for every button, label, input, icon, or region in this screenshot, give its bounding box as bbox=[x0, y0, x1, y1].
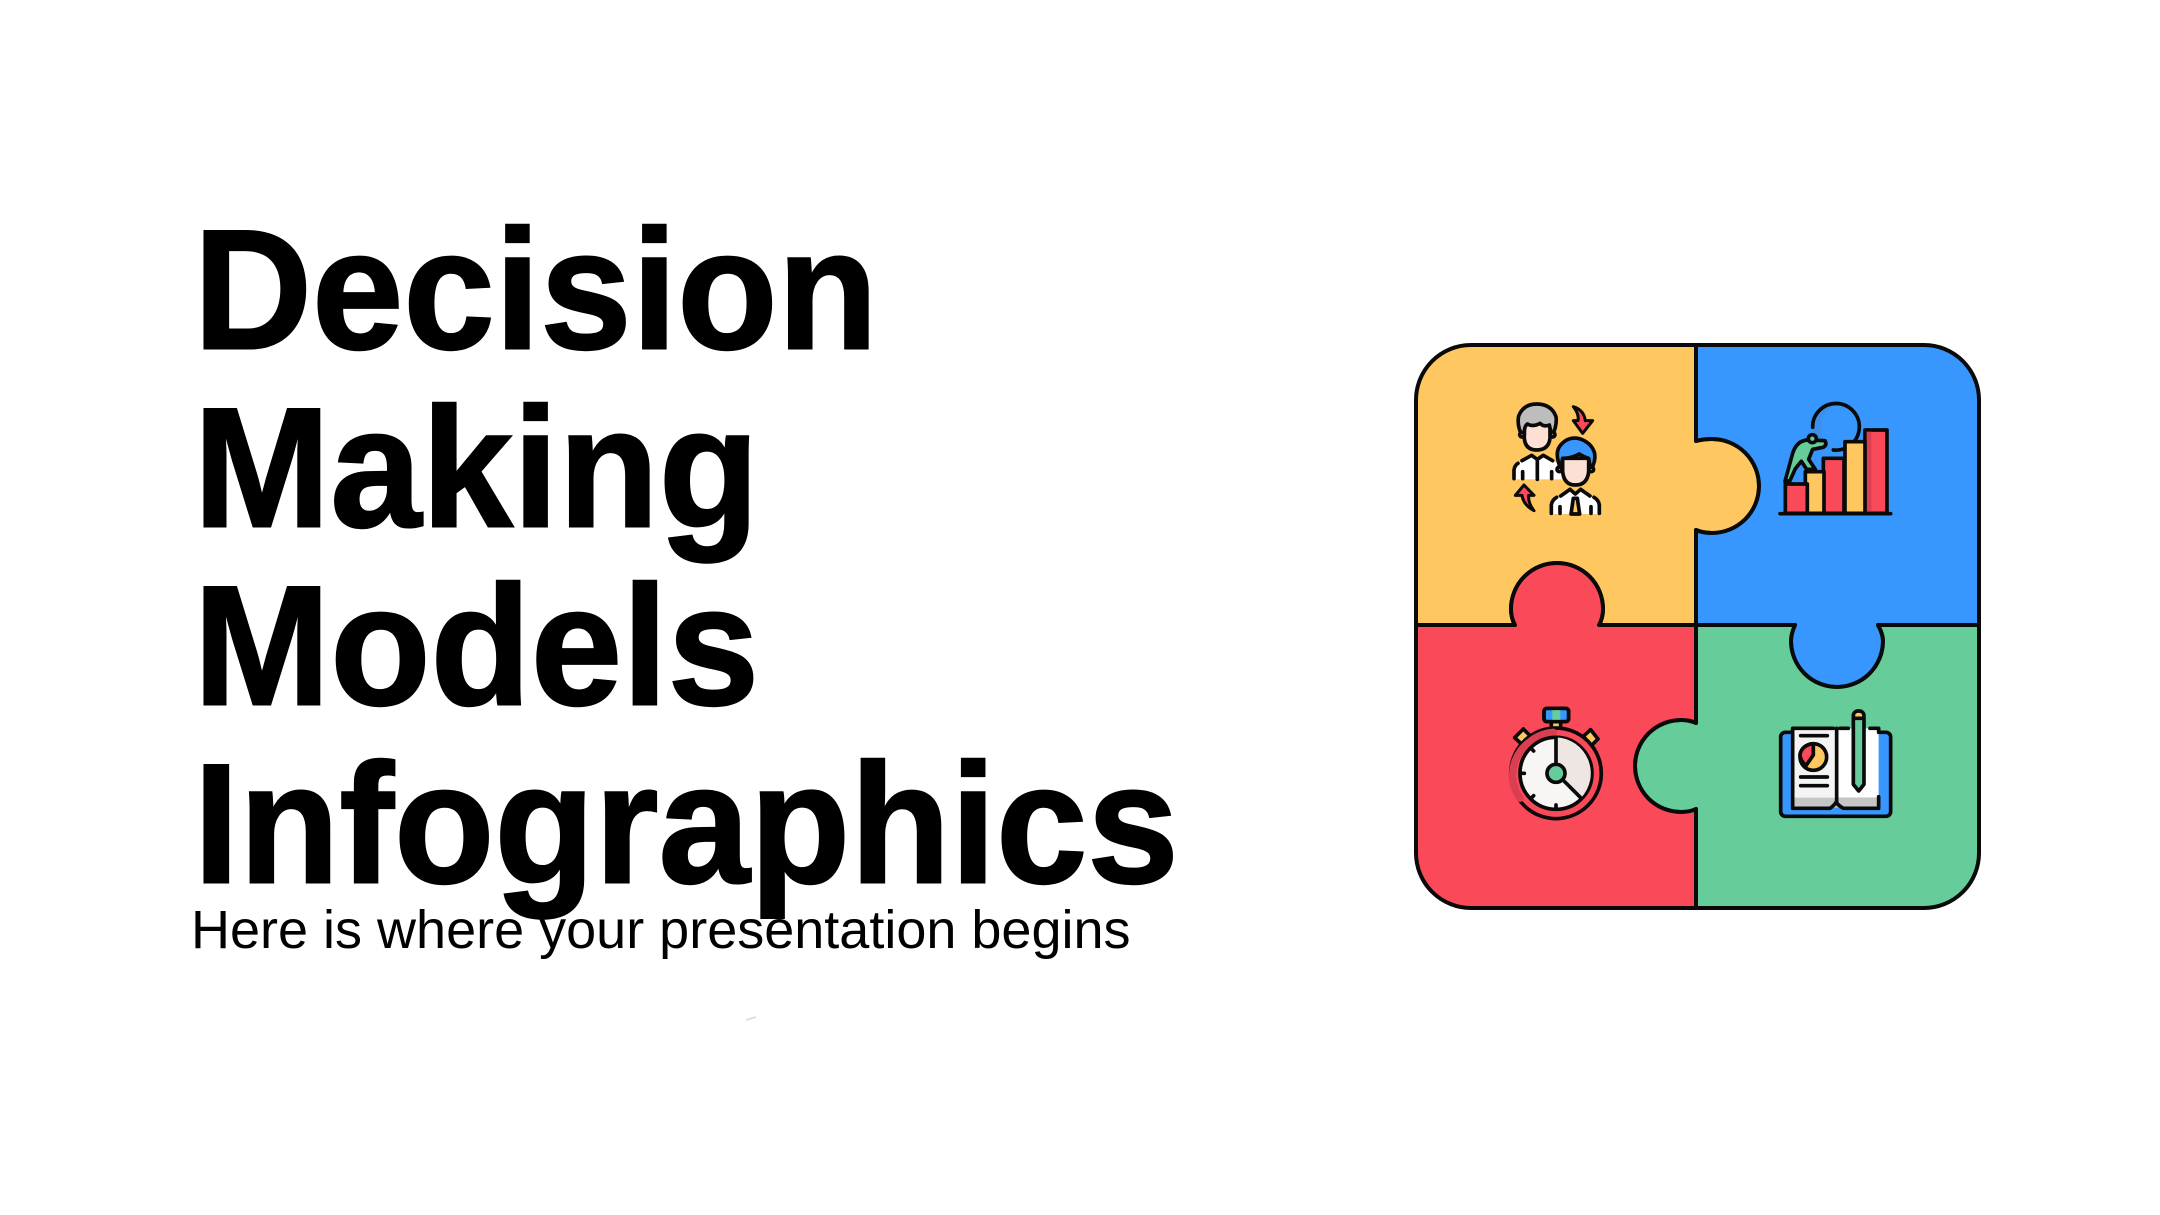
puzzle graphic bbox=[1416, 345, 1979, 908]
title bbox=[194, 195, 1179, 919]
climber bbox=[1785, 440, 1826, 481]
puzzle piece: green bbox=[1635, 625, 1979, 908]
puzzle piece: blue bbox=[1696, 345, 1979, 687]
subtitle: Here is where your presentation begins bbox=[191, 900, 1131, 960]
icon: stopwatch bbox=[1511, 708, 1601, 819]
title: Making bbox=[194, 373, 759, 563]
title: Models bbox=[194, 551, 759, 741]
icon: growth chart with person pushing ball bbox=[1780, 403, 1891, 514]
ball bbox=[1813, 404, 1836, 451]
icon: two people exchanging bbox=[1514, 404, 1600, 514]
icon: open book with pencil bbox=[1781, 711, 1891, 816]
title: Decision bbox=[194, 195, 878, 385]
title: Infographics bbox=[194, 729, 1179, 919]
small stray mark bbox=[746, 1017, 756, 1020]
puzzle piece: red bbox=[1416, 563, 1696, 908]
bars bbox=[1865, 430, 1887, 513]
puzzle piece: yellow bbox=[1416, 345, 1759, 625]
